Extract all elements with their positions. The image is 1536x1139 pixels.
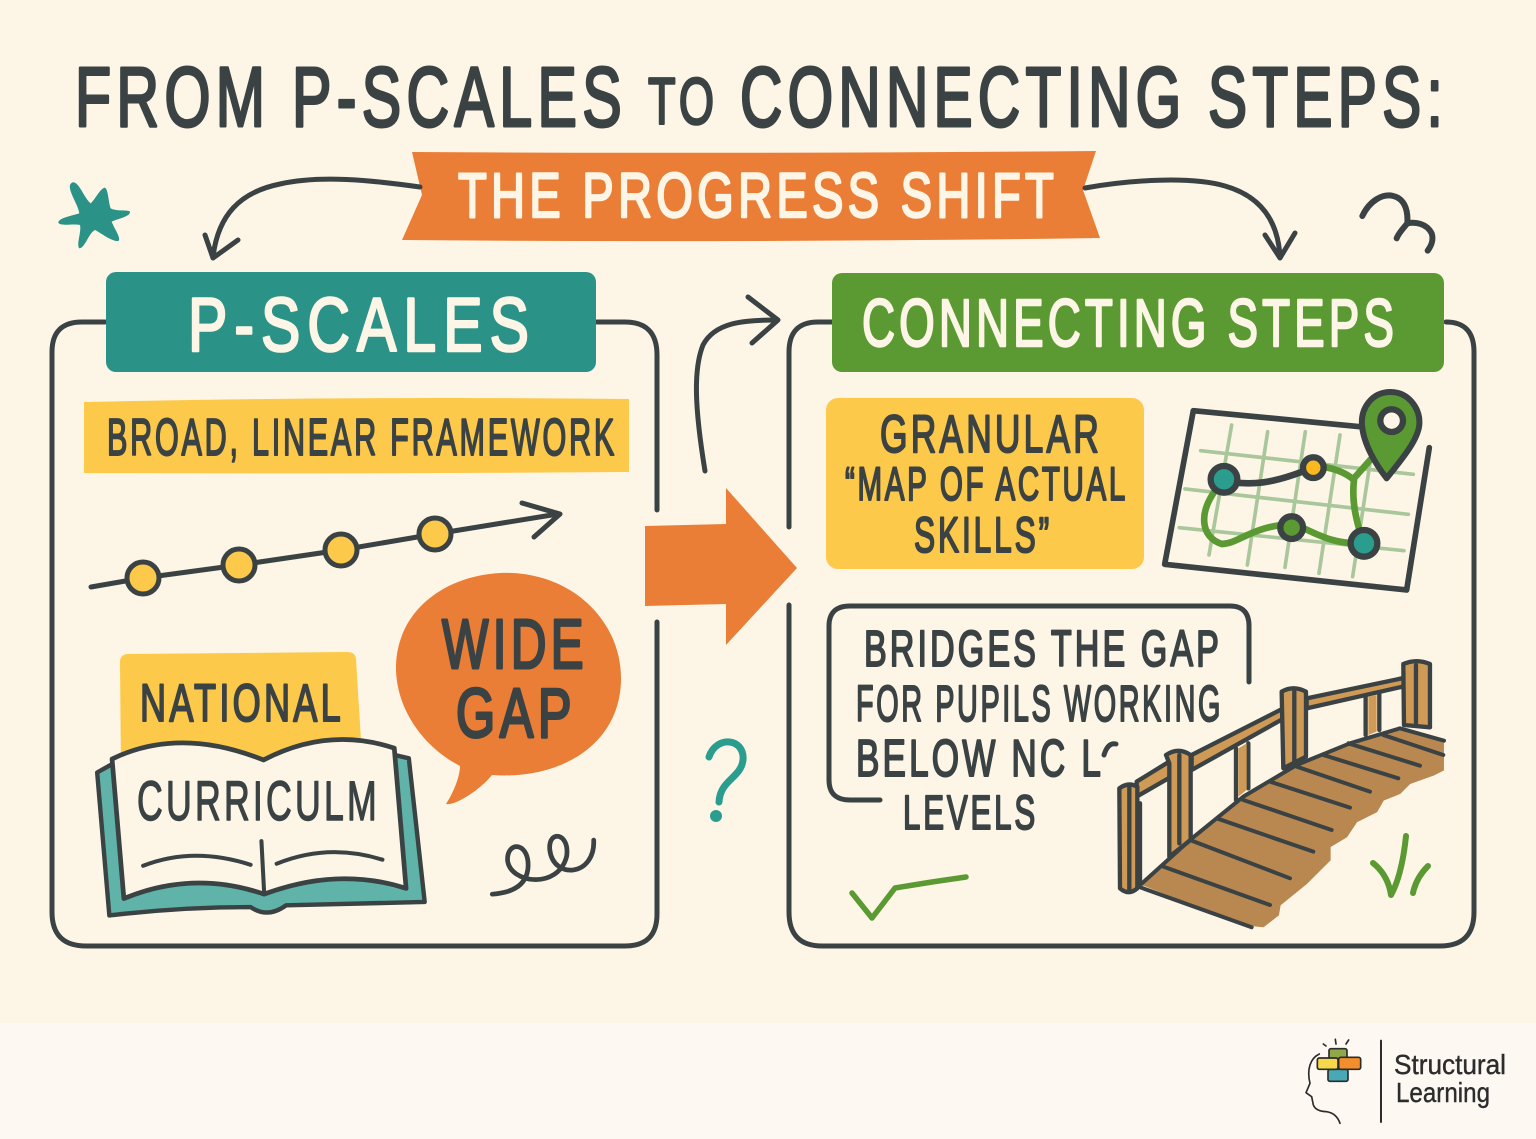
icon: open book curriculum [97, 740, 425, 915]
title [75, 50, 1448, 144]
logo icon: head and blocks [1306, 1039, 1381, 1123]
banner: the progress shift [402, 151, 1100, 241]
panel: p-scales [52, 272, 657, 946]
decorative squiggle [1362, 195, 1432, 251]
icon: skills map with route and pin [1165, 392, 1429, 590]
decorative curl [492, 836, 594, 894]
big orange arrow [645, 488, 797, 645]
callout outline: bridges the gap: BELOW NC L [856, 730, 1104, 788]
arrow: banner to p-scales [205, 179, 420, 258]
title: FROM P-SCALES [75, 50, 627, 144]
label: national: NATIONAL [140, 674, 344, 733]
logo: structural learning: Learning [1396, 1077, 1490, 1108]
label: national [120, 652, 362, 770]
label: broad linear framework [84, 398, 629, 473]
icon: wooden bridge [1119, 661, 1444, 927]
label: granular map of actual skills: “MAP OF ACTUAL [845, 457, 1128, 510]
logo: structural learning [1306, 1039, 1506, 1123]
logo: structural learning: Structural [1394, 1049, 1506, 1080]
p-scales header [106, 272, 596, 372]
label: granular map of actual skills: SKILLS” [914, 507, 1052, 563]
label: broad linear framework: BROAD, LINEAR FRAMEWORK [107, 409, 617, 467]
icon: open book curriculum: CURRICULM [137, 769, 380, 832]
connecting steps header [832, 273, 1444, 372]
icon: grass tuft [1373, 836, 1428, 895]
linear progress arrow [91, 503, 560, 594]
label: granular map of actual skills: GRANULAR [880, 405, 1102, 464]
callout outline: bridges the gap [829, 606, 1249, 840]
callout outline: bridges the gap: BRIDGES THE GAP [864, 620, 1222, 677]
arrow: banner to connecting steps [1085, 180, 1295, 258]
title: TO [648, 64, 718, 138]
p-scales header: P-SCALES [188, 283, 536, 368]
icon: teal star [58, 182, 130, 248]
icon: green check mark [852, 877, 966, 918]
icon: question mark [709, 742, 743, 822]
curved arrow to connecting steps [696, 297, 778, 471]
panel: connecting steps [789, 273, 1474, 946]
callout: wide gap [396, 573, 621, 804]
callout outline: bridges the gap: LEVELS [903, 787, 1038, 840]
callout outline: bridges the gap: FOR PUPILS WORKING [856, 675, 1223, 732]
callout: wide gap: WIDE [442, 605, 588, 683]
label: granular map of actual skills [826, 398, 1144, 569]
banner: the progress shift: THE PROGRESS SHIFT [458, 161, 1058, 231]
callout: wide gap: GAP [456, 674, 576, 752]
